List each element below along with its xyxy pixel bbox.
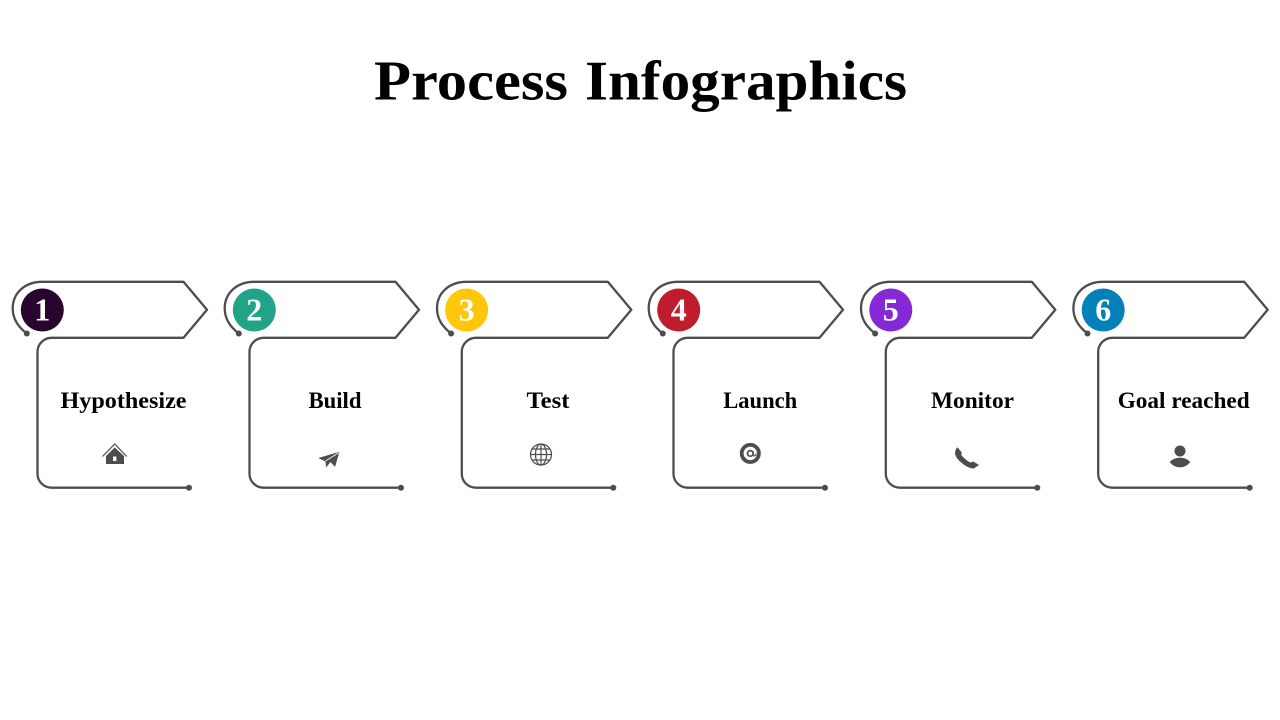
icon: person <box>1170 446 1190 467</box>
outline <box>13 282 207 491</box>
step 3: Test <box>437 282 631 491</box>
step 1: Hypothesize <box>13 282 207 491</box>
step 4: Launch <box>649 282 843 491</box>
number badge <box>21 288 64 332</box>
number badge <box>1082 288 1125 332</box>
label: Build <box>308 388 362 413</box>
step 2: Build <box>225 282 419 491</box>
label: Test <box>526 388 570 413</box>
number badge: 1 <box>34 292 50 328</box>
label: Hypothesize <box>60 388 186 413</box>
step 5: Monitor <box>861 282 1055 491</box>
number badge: 3 <box>459 292 475 328</box>
label: Monitor <box>931 388 1014 413</box>
number badge: 2 <box>246 292 262 328</box>
label: Goal reached <box>1118 388 1250 413</box>
icon: paper plane <box>318 452 340 468</box>
outline <box>437 282 631 491</box>
number badge: 4 <box>671 292 687 328</box>
outline <box>1073 282 1268 491</box>
icon: house <box>102 444 127 464</box>
number badge <box>657 288 700 332</box>
icon: phone <box>955 447 979 468</box>
number badge: 6 <box>1095 292 1111 328</box>
outline <box>649 282 843 491</box>
number badge <box>445 288 488 332</box>
label: Launch <box>723 388 797 413</box>
icon: globe <box>530 444 552 465</box>
step 6: Goal reached <box>1073 282 1268 491</box>
number badge: 5 <box>883 292 899 328</box>
outline <box>225 282 419 491</box>
outline <box>861 282 1055 491</box>
title: Process <box>374 50 568 112</box>
number badge <box>869 288 912 332</box>
number badge <box>233 288 276 332</box>
icon: at sign <box>742 445 759 462</box>
title: Infographics <box>585 50 907 112</box>
